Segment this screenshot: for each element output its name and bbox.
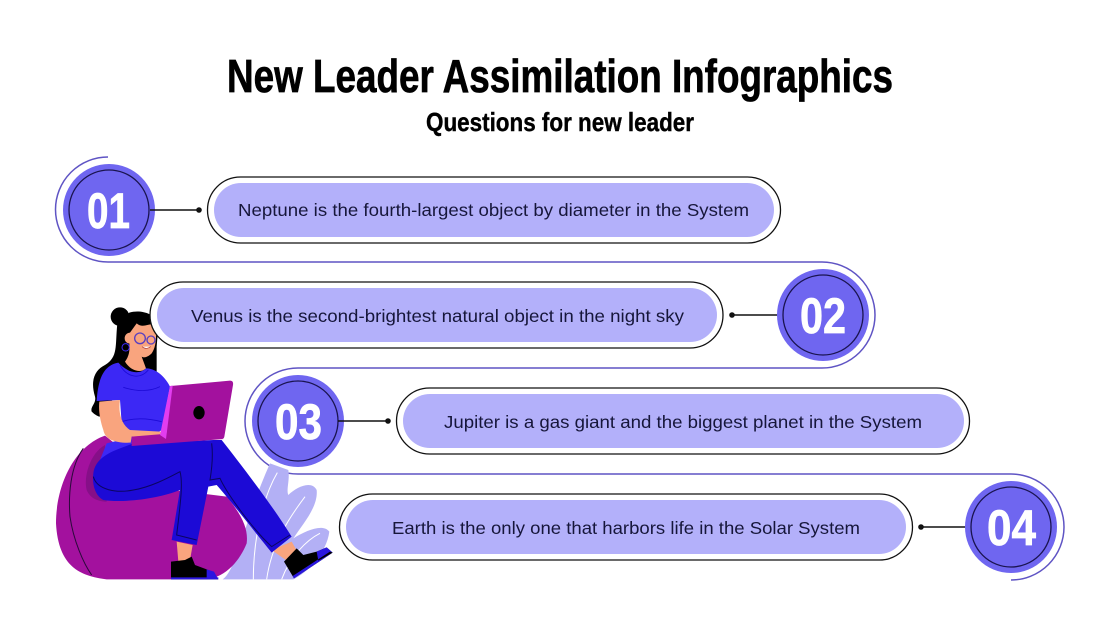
connector: winding outline linking the four steps bbox=[56, 157, 1064, 580]
pill 01 bbox=[208, 177, 780, 243]
connector line 03 bbox=[338, 418, 391, 424]
face and neck bbox=[125, 323, 156, 371]
number badge 04 bbox=[965, 481, 1057, 573]
pill 04: Earth is the only one that harbors life in the Solar System bbox=[392, 518, 860, 538]
step 01 bbox=[63, 164, 780, 256]
pill 02 bbox=[150, 282, 723, 348]
arm bbox=[99, 400, 161, 443]
pill 04 bbox=[340, 494, 912, 560]
step 04 bbox=[340, 481, 1057, 573]
pill 02: Venus is the second-brightest natural object in the night sky bbox=[191, 306, 684, 326]
laptop bbox=[132, 381, 233, 446]
plant bbox=[223, 463, 329, 579]
number badge 03: 03 bbox=[275, 394, 322, 450]
number badge 04: 04 bbox=[987, 500, 1036, 556]
pill 03: Jupiter is a gas giant and the biggest planet in the System bbox=[444, 412, 922, 432]
smile bbox=[142, 347, 151, 348]
number badge 02: 02 bbox=[800, 288, 846, 344]
pill 01: Neptune is the fourth-largest object by diameter in the System bbox=[238, 200, 749, 220]
glasses bbox=[135, 333, 155, 344]
shirt bbox=[97, 363, 170, 460]
connector line 01 bbox=[150, 207, 202, 213]
beanbag bbox=[56, 436, 247, 579]
number badge 01 bbox=[63, 164, 155, 256]
step 03 bbox=[252, 375, 970, 467]
number badge 03 bbox=[252, 375, 344, 467]
connector line 02 bbox=[729, 312, 782, 318]
earring bbox=[122, 344, 129, 351]
shoes bbox=[171, 547, 333, 579]
illustration: woman on beanbag with laptop bbox=[56, 307, 333, 579]
number badge 01: 01 bbox=[87, 183, 130, 239]
jeans bbox=[93, 440, 292, 553]
pill 03 bbox=[396, 388, 970, 454]
title: New Leader Assimilation Infographics bbox=[227, 50, 893, 102]
hair bbox=[91, 307, 159, 417]
number badge 02 bbox=[777, 269, 869, 361]
step 02 bbox=[150, 269, 869, 361]
connector line 04 bbox=[918, 524, 972, 530]
subtitle: Questions for new leader bbox=[426, 107, 694, 137]
ankles bbox=[177, 542, 298, 562]
